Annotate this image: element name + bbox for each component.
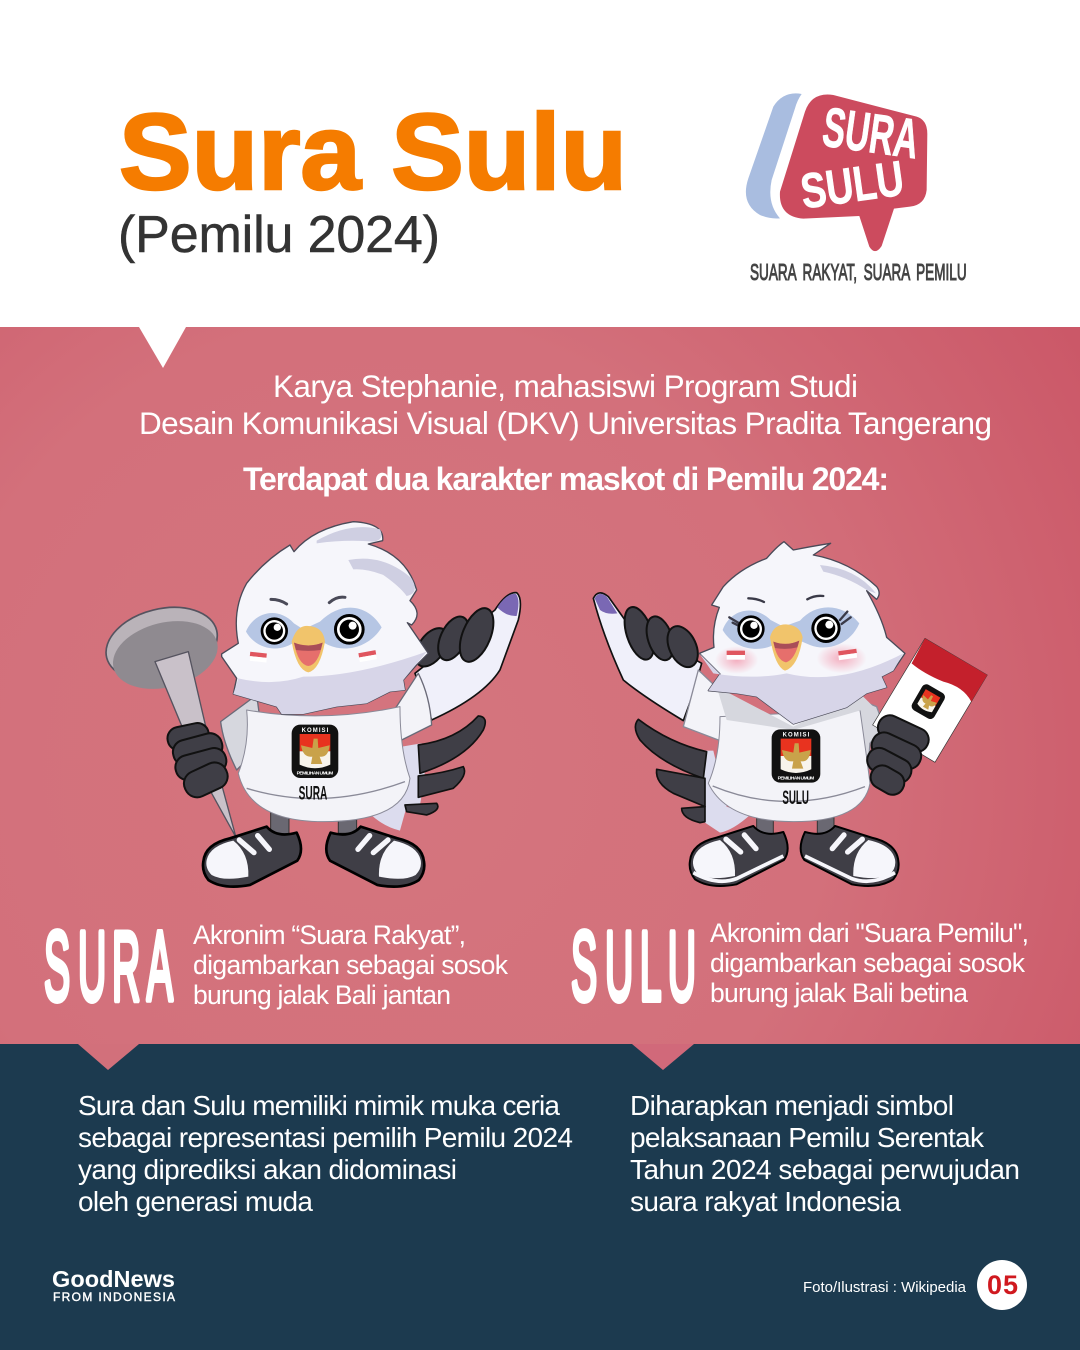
panel: mascots: [0, 327, 1080, 1070]
Sulu description: digambarkan sebagai sosok: [710, 948, 1026, 978]
Sura description: digambarkan sebagai sosok: [193, 950, 509, 980]
text block: facial expression: sebagai representasi pemilih Pemilu 2024: [78, 1122, 573, 1153]
text block: symbol hope: [630, 1090, 1020, 1217]
page number badge: 05: [987, 1270, 1018, 1300]
cheeks: [727, 649, 857, 660]
text block: symbol hope: suara rakyat Indonesia: [630, 1186, 901, 1217]
white pointer notch: [139, 327, 186, 368]
shirt sleeves: [683, 670, 733, 741]
ballot card: [873, 638, 987, 762]
right shoe: [801, 826, 899, 886]
collar: [717, 687, 873, 730]
intro text: Karya Stephanie, mahasiswi Program Studi: [273, 368, 858, 404]
Sulu description: burung jalak Bali betina: [710, 978, 968, 1008]
left shoe: [203, 827, 301, 887]
text block: facial expression: [78, 1090, 573, 1217]
nail shaft: [155, 652, 236, 837]
shirt name: SURA: [299, 783, 327, 804]
Sulu wordmark: SULU: [571, 911, 696, 1021]
raised arm: [593, 593, 702, 721]
cheeks: [250, 650, 377, 663]
hair shading: [317, 527, 415, 596]
eye mask: [723, 607, 859, 649]
subtitle: (Pemilu 2024): [118, 206, 440, 264]
logo: Sura Sulu speech bubble: SULU: [797, 151, 907, 220]
shirt name: SULU: [782, 788, 809, 809]
KPU badge: KOMISI: [302, 728, 329, 734]
raised hand fingers: [619, 603, 704, 672]
text block: symbol hope: pelaksanaan Pemilu Serentak: [630, 1122, 985, 1153]
nail head: [98, 596, 225, 699]
hand gripping nail: [165, 721, 232, 801]
blush: [715, 646, 758, 674]
subheading: Terdapat dua karakter maskot di Pemilu 2024:: [243, 461, 889, 497]
KPU badge: [292, 725, 338, 778]
eye mask: [246, 608, 382, 649]
Sulu description: Akronim dari "Suara Pemilu",: [710, 918, 1029, 948]
raised arm: [415, 593, 520, 720]
logo: GoodNews from Indonesia: [52, 1266, 175, 1304]
logo: Sura Sulu speech bubble: SURA: [819, 95, 923, 171]
left shoe: [690, 826, 788, 886]
KPU badge: KOMISI: [783, 733, 810, 739]
page number badge: [977, 1260, 1027, 1310]
text block: symbol hope: Diharapkan menjadi simbol: [630, 1090, 954, 1121]
eyes: [737, 615, 765, 643]
brows: [271, 597, 345, 604]
logo: GoodNews from Indonesia: FROM INDONESIA: [53, 1290, 175, 1304]
text block: facial expression: Sura dan Sulu memiliki mimik muka ceria: [78, 1090, 560, 1121]
shirt sleeves: [221, 695, 263, 770]
mascot: Sulu: [593, 542, 987, 886]
Sulu description: [710, 918, 1029, 1008]
intro text: Desain Komunikasi Visual (DKV) Universitas Pradita Tangerang: [139, 405, 992, 441]
photo credit: Foto/Ilustrasi : Wikipedia: [803, 1279, 967, 1296]
legs: [271, 810, 289, 837]
panel: header: [118, 91, 967, 285]
shirt body: [238, 707, 410, 822]
tail feathers: [635, 719, 750, 833]
logo: Sura Sulu speech bubble: [746, 93, 967, 285]
tail feathers: [369, 716, 485, 831]
Sura wordmark: SURA: [44, 911, 173, 1021]
Sura description: [193, 920, 509, 1010]
text block: symbol hope: Tahun 2024 sebagai perwujudan: [630, 1154, 1020, 1185]
eyes: [261, 617, 288, 645]
beak: [770, 624, 803, 671]
right shoe: [326, 827, 424, 887]
Sura description: burung jalak Bali jantan: [193, 980, 451, 1010]
head: [699, 542, 905, 724]
Sura description: Akronim “Suara Rakyat”,: [193, 920, 466, 950]
intro text: [139, 368, 992, 441]
KPU badge: PEMILIHAN UMUM: [297, 771, 333, 777]
brows and lashes: [729, 596, 851, 627]
hand gripping card: [863, 712, 933, 799]
hair shading: [820, 565, 876, 593]
KPU badge: [772, 729, 820, 783]
text block: facial expression: oleh generasi muda: [78, 1186, 313, 1217]
legs: [757, 817, 773, 837]
shirt body: [708, 710, 870, 822]
head: [222, 522, 428, 714]
pointer: left: [78, 1044, 139, 1070]
beak: [292, 626, 325, 672]
text block: facial expression: yang diprediksi akan didominasi: [78, 1154, 457, 1185]
panel: navy footer background: [0, 1044, 1080, 1350]
title: Sura Sulu: [119, 91, 627, 212]
logo: GoodNews from Indonesia: GoodNews: [52, 1266, 175, 1292]
mascot: Sura: [98, 522, 520, 887]
pointer: right: [632, 1044, 694, 1070]
KPU badge: PEMILIHAN UMUM: [778, 775, 814, 781]
raised hand fingers: [409, 603, 500, 672]
